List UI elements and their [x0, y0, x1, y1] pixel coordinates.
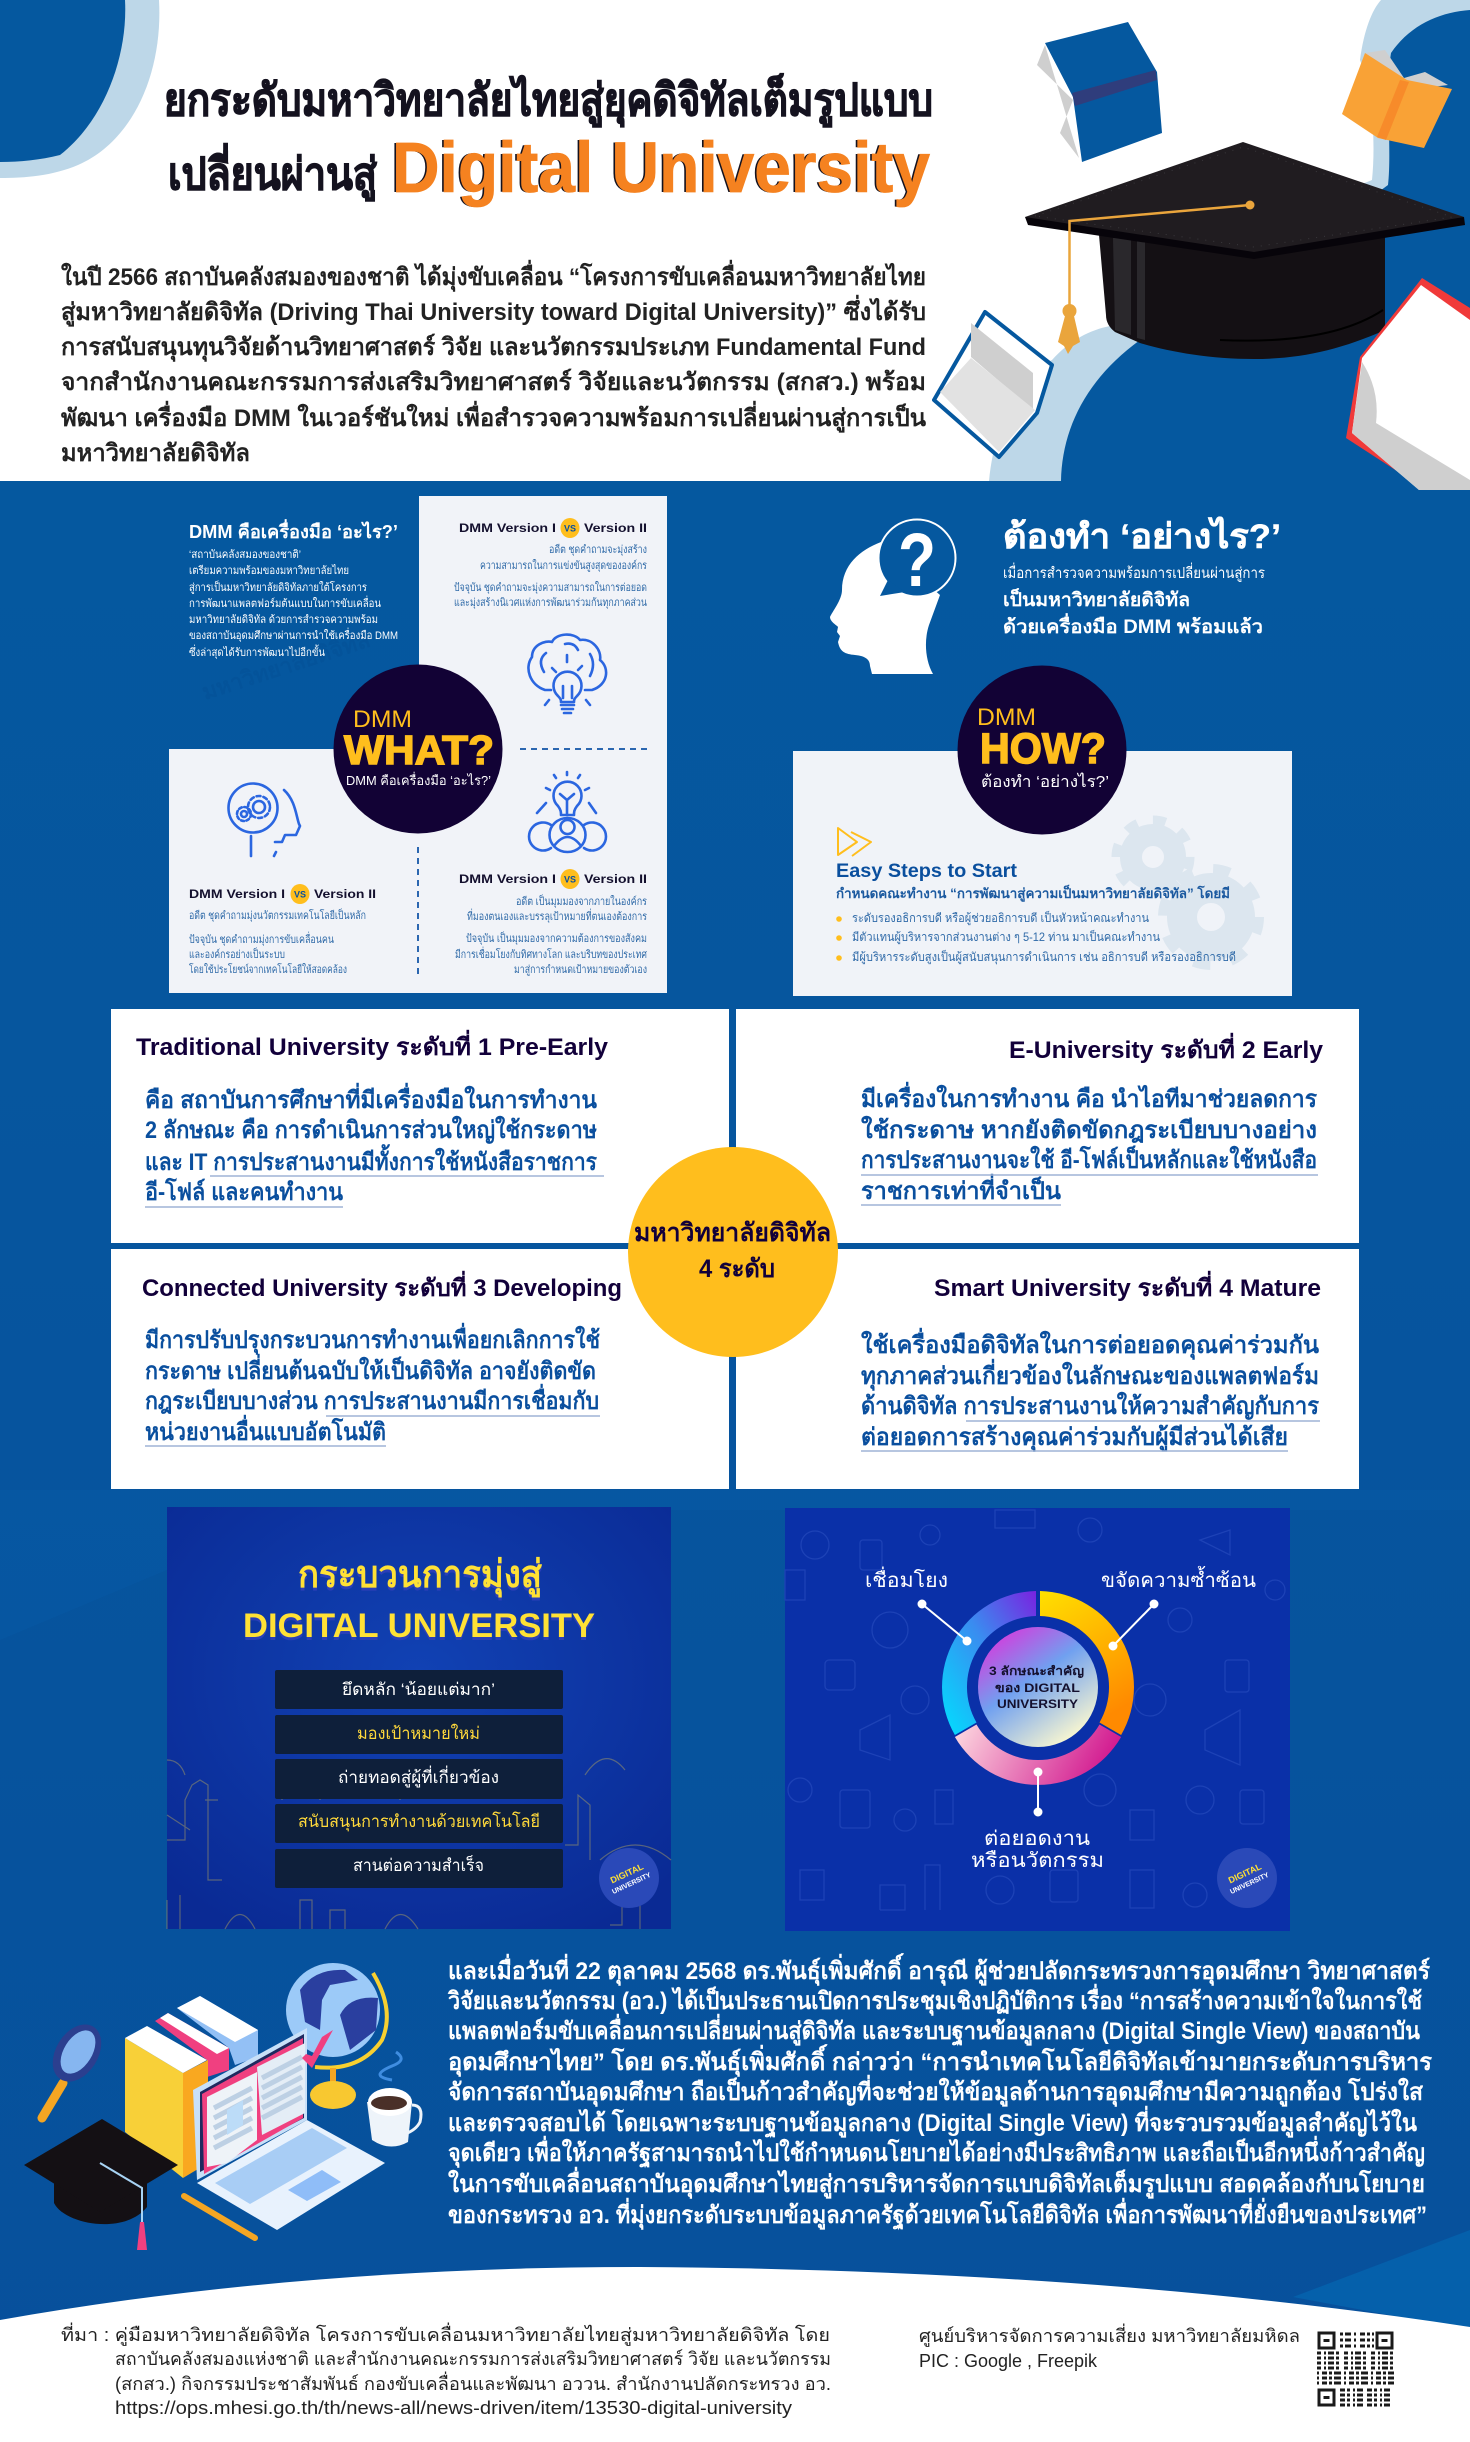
- text: easy steps: [836, 861, 1236, 965]
- panel: smart university level 4: ทุกภาคส่วนเกี่ยวข้องในลักษณะของแพลตฟอร์ม: [861, 1358, 1319, 1392]
- text: easy steps: กำหนดคณะทำงาน “การพัฒนาสู่ความเป็นมหาวิทยาลัยดิจิทัล” โดยมี: [836, 884, 1230, 902]
- intro paragraph: [61, 259, 927, 467]
- text: easy steps: มีตัวแทนผู้บริหารจากส่วนงานต่าง ๆ 5-12 ท่าน มาเป็นคณะทำงาน: [852, 929, 1160, 945]
- labels: characteristics: [865, 1566, 1256, 1872]
- icon: books: [125, 1996, 258, 2178]
- icon: head with question mark: [830, 518, 956, 674]
- text: version comparison lower right: มาสู่การกำหนดเป้าหมายของตัวเอง: [514, 964, 647, 976]
- heading: how to do it: [1003, 516, 1281, 638]
- text: version comparison top right: ปัจจุบัน ชุดคำถามจะมุ่งความสามารถในการต่อยอด: [454, 581, 647, 594]
- text: version comparison lower right: [455, 869, 647, 976]
- text: news paragraph: และเมื่อวันที่ 22 ตุลาคม 2568 ดร.พันธุ์เพิ่มศักดิ์ อารุณี ผู้ช่วยปลัดกระทรวงการอุดมศึกษา วิทยาศาสตร์: [448, 1953, 1430, 1987]
- text: version comparison lower left: โดยใช้ประโยชน์จากเทคโนโลยีให้สอดคล้อง: [189, 962, 347, 976]
- icon: head with question mark: ?: [898, 518, 936, 603]
- text: version comparison lower left: และองค์กรอย่างเป็นระบบ: [189, 947, 285, 961]
- intro paragraph: พัฒนา เครื่องมือ DMM ในเวอร์ชันใหม่ เพื่อสำรวจความพร้อมการเปลี่ยนผ่านสู่การเป็น: [61, 400, 927, 433]
- title: process heading: DIGITAL UNIVERSITY: [243, 1610, 595, 1648]
- heading: how to do it: ด้วยเครื่องมือ DMM พร้อมแล้ว: [1003, 613, 1263, 638]
- intro paragraph: มหาวิทยาลัยดิจิทัล: [61, 440, 250, 467]
- badge: DMM HOW circle: [958, 666, 1126, 834]
- intro paragraph: สู่มหาวิทยาลัยดิจิทัล (Driving Thai University toward Digital University)” ซึ่งได้รับ: [61, 294, 926, 327]
- icon: graduation cap: [1025, 142, 1465, 359]
- panel: e-university level 2: การประสานงานจะใช้ อี-โฟล์เป็นหลักและใช้หนังสือ: [861, 1145, 1317, 1174]
- text: DMM what is it: ของสถาบันอุดมศึกษาผ่านการนำใช้เครื่องมือ DMM: [189, 627, 398, 642]
- text: DMM what is it: มหาวิทยาลัยดิจิทัล ด้วยการสำรวจความพร้อม: [189, 614, 378, 626]
- panel background: how card: [793, 751, 1292, 996]
- list: process steps: ยึดหลัก ‘น้อยแต่มาก’: [342, 1680, 495, 1699]
- icon: red book: [1346, 278, 1470, 490]
- panel: 3 characteristics: [785, 1508, 1290, 1931]
- panel: smart university level 4: ใช้เครื่องมือดิจิทัลในการต่อยอดคุณค่าร่วมกัน: [861, 1327, 1320, 1361]
- badge: DMM HOW circle: ต้องทำ ‘อย่างไร?’: [981, 772, 1109, 791]
- text: news paragraph: จัดการสถาบันอุดมศึกษา ถือเป็นก้าวสำคัญที่จะช่วยให้ข้อมูลด้านการอุดมศึกษามีความถูกต้อง โปร่งใส: [448, 2074, 1423, 2108]
- text: news paragraph: อุดมศึกษาไทย” โดย ดร.พันธุ์เพิ่มศักดิ์ กล่าวว่า “การนำเทคโนโลยีดิจิทัลเข้ามายกระดับการบริหาร: [448, 2044, 1432, 2078]
- panel: traditional university level 1: Traditional University ระดับที่ 1 Pre-Early: [136, 1029, 609, 1061]
- title: process heading: [243, 1554, 595, 1648]
- icon: flying blue book: [1037, 22, 1162, 162]
- panel: connected university level 3: กระดาษ เปลี่ยนต้นฉบับให้เป็นดิจิทัล อาจยังติดขัด: [145, 1353, 596, 1385]
- dashed divider vertical: [417, 847, 419, 975]
- intro paragraph: จากสำนักงานคณะกรรมการส่งเสริมวิทยาศาสตร์ วิจัยและนวัตกรรม (สกสว.) พร้อม: [61, 368, 926, 396]
- labels: characteristics: เชื่อมโยง: [865, 1566, 948, 1592]
- text: sources: (สกสว.) กิจกรรมประชาสัมพันธ์ กองขับเคลื่อนและพัฒนา อววน. สำนักงานปลัดกระทรวง อว.: [115, 2371, 831, 2394]
- panel: connected university level 3: [111, 1249, 729, 1489]
- panel: smart university level 4: ด้านดิจิทัล การประสานงานให้ความสำคัญกับการ: [861, 1391, 1319, 1420]
- badge: logo right: [1217, 1848, 1277, 1908]
- panel: traditional university level 1: คือ สถาบันการศึกษาที่มีเครื่องมือในการทำงาน: [145, 1082, 598, 1114]
- text: version comparison top right: DMM Version I: [459, 523, 556, 535]
- icon: brain with light bulb: [528, 635, 606, 713]
- panel: DMM how: [793, 516, 1292, 996]
- badge: digital university 4 levels: 4 ระดับ: [699, 1255, 775, 1283]
- text: sources: https://ops.mhesi.go.th/th/news-all/news-driven/item/13530-digital-university: [115, 2398, 792, 2418]
- text: version comparison lower left: VS: [294, 890, 306, 900]
- badge: logo right: DIGITAL: [1227, 1861, 1263, 1885]
- intro paragraph: ในปี 2566 สถาบันคลังสมองของชาติ ได้มุ่งขับเคลื่อน “โครงการขับเคลื่อนมหาวิทยาลัยไทย: [61, 259, 926, 293]
- badge: DMM WHAT circle: [334, 664, 502, 834]
- icon: magnifier: [42, 2016, 111, 2118]
- chart: donut: 3 ลักษณะสำคัญ: [989, 1664, 1084, 1678]
- panel background: what cards: [169, 496, 667, 993]
- badge: DMM WHAT circle: DMM: [353, 706, 412, 733]
- dashed divider horizontal: [520, 748, 648, 750]
- text: DMM what is it: การพัฒนาแพลตฟอร์มต้นแบบในการขับเคลื่อน: [189, 595, 381, 610]
- title: [164, 73, 933, 208]
- badge: logo left: UNIVERSITY: [611, 1872, 653, 1896]
- text: version comparison lower right: Version II: [584, 874, 647, 886]
- panel: traditional university level 1: 2 ลักษณะ คือ การดำเนินการส่วนใหญ่ใช้กระดาษ: [145, 1115, 597, 1144]
- qr code: [1317, 2333, 1394, 2405]
- text: credits: [919, 2323, 1300, 2371]
- panel: traditional university level 1: [111, 1009, 729, 1243]
- chart: donut: UNIVERSITY: [997, 1697, 1078, 1711]
- chart: donut: ของ DIGITAL: [995, 1681, 1080, 1695]
- title: process heading: กระบวนการมุ่งสู่: [298, 1557, 543, 1601]
- text: easy steps: ระดับรองอธิการบดี หรือผู้ช่วยอธิการบดี เป็นหัวหน้าคณะทำงาน: [852, 910, 1149, 926]
- badge: logo left: DIGITAL: [609, 1861, 645, 1885]
- text: sources: [61, 2322, 831, 2418]
- labels: characteristics: ต่อยอดงาน: [984, 1828, 1090, 1850]
- panel: e-university level 2: มีเครื่องในการทำงาน คือ นำไอทีมาช่วยลดการ: [861, 1081, 1317, 1113]
- heading: how to do it: เมื่อการสำรวจความพร้อมการเปลี่ยนผ่านสู่การ: [1003, 562, 1265, 582]
- panel: e-university level 2: ราชการเท่าที่จำเป็น: [861, 1173, 1062, 1205]
- panel: smart university level 4: Smart University ระดับที่ 4 Mature: [934, 1270, 1321, 1302]
- panel: smart university level 4: ต่อยอดการสร้างคุณค่าร่วมกับผู้มีส่วนได้เสีย: [861, 1422, 1288, 1453]
- footer white curve: [0, 2267, 1470, 2442]
- icon: pencil: [184, 2196, 255, 2238]
- list: process steps: สนับสนุนการทำงานด้วยเทคโนโลยี: [298, 1811, 540, 1832]
- badge: digital university 4 levels: [628, 1147, 838, 1357]
- labels: characteristics: ขจัดความซ้ำซ้อน: [1101, 1566, 1256, 1592]
- skyline decoration: [167, 1759, 671, 1929]
- list: process steps: ถ่ายทอดสู่ผู้ที่เกี่ยวข้อง: [338, 1765, 499, 1788]
- title: เปลี่ยนผ่านสู่: [168, 143, 377, 201]
- badge: DMM WHAT circle: WHAT?: [344, 727, 494, 773]
- text: version comparison lower left: [189, 884, 376, 976]
- illustration: education desk: [24, 1963, 421, 2250]
- text: DMM what is it: DMM คือเครื่องมือ ‘อะไร?’: [189, 519, 398, 542]
- badge: logo left: [599, 1848, 659, 1908]
- text: version comparison lower right: DMM Version I: [459, 874, 556, 886]
- icon: globe: [286, 1963, 387, 2109]
- text: version comparison lower right: ที่มองตนเองและบรรลุเป้าหมายที่ตนเองต้องการ: [467, 908, 647, 923]
- heading: how to do it: เป็นมหาวิทยาลัยดิจิทัล: [1003, 587, 1190, 611]
- background icon pattern: [785, 1510, 1285, 1910]
- title: process heading: กระบวนการมุ่งสู่: [298, 1554, 543, 1598]
- panel: e-university level 2: E-University ระดับที่ 2 Early: [1009, 1032, 1324, 1064]
- panel: connected university level 3: หน่วยงานอื่นแบบอัตโนมัติ: [145, 1414, 386, 1446]
- panel: connected university level 3: กฎระเบียบบางส่วน การประสานงานมีการเชื่อมกับ: [145, 1383, 599, 1415]
- text: DMM what is it: เตรียมความพร้อมของมหาวิทยาลัยไทย: [189, 564, 349, 577]
- text: version comparison lower left: DMM Version I: [189, 889, 285, 901]
- text: easy steps: Easy Steps to Start: [836, 861, 1018, 882]
- chart: donut: [942, 1591, 1134, 1785]
- text: version comparison lower right: อดีต เป็นมุมมองจากภายในองค์กร: [516, 894, 647, 908]
- list: process steps: มองเป้าหมายใหม่: [357, 1723, 480, 1743]
- icon: gears watermark: [1116, 820, 1259, 965]
- text: version comparison lower left: ปัจจุบัน ชุดคำถามมุ่งการขับเคลื่อนคน: [189, 931, 334, 946]
- text: DMM what is it: สู่การเป็นมหาวิทยาลัยดิจิทัลภายใต้โครงการ: [189, 580, 367, 594]
- labels: characteristics: หรือนวัตกรรม: [971, 1850, 1104, 1872]
- panel: DMM what: [169, 496, 667, 993]
- icon: laptop with book: [193, 2028, 385, 2230]
- list: process steps: สานต่อความสำเร็จ: [353, 1854, 484, 1875]
- heading: how to do it: ต้องทำ ‘อย่างไร?’: [1003, 516, 1281, 556]
- title: ยกระดับมหาวิทยาลัยไทยสู่ยุคดิจิทัลเต็มรูปแบบ: [164, 73, 933, 128]
- text: version comparison top right: และมุ่งสร้างนิเวศแห่งการพัฒนาร่วมกันทุกภาคส่วน: [454, 597, 647, 609]
- text: version comparison top right: VS: [564, 524, 576, 534]
- text: version comparison top right: อดีต ชุดคำถามจะมุ่งสร้าง: [549, 543, 647, 556]
- list: process steps: [275, 1670, 563, 1888]
- icon: orange book: [1342, 50, 1452, 148]
- text: credits: ศูนย์บริหารจัดการความเสี่ยง มหาวิทยาลัยมหิดล: [919, 2323, 1300, 2347]
- panel: e-university level 2: [736, 1009, 1359, 1243]
- text: DMM what is it: ‘สถาบันคลังสมองของชาติ’: [189, 549, 301, 561]
- icon: white open book: [934, 312, 1052, 457]
- text: version comparison lower right: ปัจจุบัน เป็นมุมมองจากความต้องการของสังคม: [466, 931, 647, 945]
- decoration: blue shapes behind graduation cap: [989, 0, 1470, 481]
- watermark text: มหาวิทยาลัยดิจิทัล: [199, 627, 373, 705]
- badge: digital university 4 levels: มหาวิทยาลัยดิจิทัล: [634, 1219, 831, 1247]
- icon: people with light bulb: [529, 772, 606, 852]
- badge: DMM WHAT circle: DMM คือเครื่องมือ ‘อะไร?’: [346, 772, 491, 788]
- text: sources: ที่มา : คู่มือมหาวิทยาลัยดิจิทัล โครงการขับเคลื่อนมหาวิทยาลัยไทยสู่มหาวิทยาลัยดิจิทัล โดย: [61, 2322, 830, 2346]
- panel: traditional university level 1: และ IT การประสานงานมีทั้งการใช้หนังสือราชการ: [145, 1143, 597, 1176]
- icon: coffee mug: [367, 2052, 421, 2147]
- panel: traditional university level 1: อี-โฟล์ และคนทำงาน: [145, 1177, 344, 1206]
- text: version comparison lower left: อดีต ชุดคำถามมุ่งนวัตกรรมเทคโนโลยีเป็นหลัก: [189, 908, 366, 922]
- panel: connected university level 3: Connected University ระดับที่ 3 Developing: [142, 1270, 622, 1302]
- text: version comparison lower right: มีการเชื่อมโยงกับทิศทางโลก และบริบทของประเทศ: [455, 946, 647, 961]
- title: Digital University: [392, 129, 930, 208]
- panel: smart university level 4: [736, 1249, 1359, 1489]
- text: version comparison lower left: Version II: [314, 889, 376, 901]
- panel: process to digital university: [167, 1507, 671, 1929]
- intro paragraph: การสนับสนุนทุนวิจัยด้านวิทยาศาสตร์ วิจัย และนวัตกรรมประเภท Fundamental Fund: [61, 333, 926, 363]
- text: version comparison top right: Version II: [584, 523, 647, 535]
- text: news paragraph: ในการขับเคลื่อนสถาบันอุดมศึกษาไทยสู่การบริหารจัดการแบบดิจิทัลเต็มรูปแบบ สอดคล้องกับนโยบาย: [448, 2166, 1425, 2200]
- icon: double arrow: [838, 828, 871, 856]
- text: DMM what is it: [189, 519, 398, 659]
- title: Digital University: [390, 129, 928, 208]
- badge: DMM HOW circle: HOW?: [980, 725, 1106, 773]
- connectors: donut callouts: [918, 1600, 1158, 1816]
- text: version comparison top right: ความสามารถในการแข่งขันสูงสุดขององค์กร: [480, 559, 647, 572]
- text: DMM what is it: ซึ่งล่าสุดได้รับการพัฒนาไปอีกขั้น: [189, 644, 325, 659]
- badge: DMM HOW circle: DMM: [977, 704, 1036, 731]
- text: sources: สถาบันคลังสมองแห่งชาติ และสำนักงานคณะกรรมการส่งเสริมวิทยาศาสตร์ วิจัย และนวัตกรรม: [115, 2349, 831, 2369]
- panel: connected university level 3: มีการปรับปรุงกระบวนการทำงานเพื่อยกเลิกการใช้: [145, 1322, 600, 1356]
- text: easy steps: มีผู้บริหารระดับสูงเป็นผู้สนับสนุนการดำเนินการ เช่น อธิการบดี หรือรองอธิการบดี: [852, 949, 1236, 965]
- panel: e-university level 2: ใช้กระดาษ หากยังติดขัดกฎระเบียบบางอย่าง: [861, 1115, 1317, 1144]
- text: news paragraph: และตรวจสอบได้ โดยเฉพาะระบบฐานข้อมูลกลาง (Digital Single View) ที่จะรวบรวมข้อมูลสำคัญไว้ใน: [448, 2105, 1418, 2139]
- text: version comparison top right: [454, 518, 647, 609]
- decoration: top left blue circle: [0, 0, 159, 178]
- icon: graduation cap small: [24, 2119, 178, 2250]
- badge: logo right: UNIVERSITY: [1229, 1872, 1271, 1896]
- text: version comparison lower right: VS: [564, 874, 576, 884]
- title: process heading: DIGITAL UNIVERSITY: [243, 1607, 595, 1645]
- icon: head with gears: [228, 784, 300, 856]
- text: credits: PIC : Google , Freepik: [919, 2351, 1098, 2371]
- text: news paragraph: [448, 1953, 1432, 2231]
